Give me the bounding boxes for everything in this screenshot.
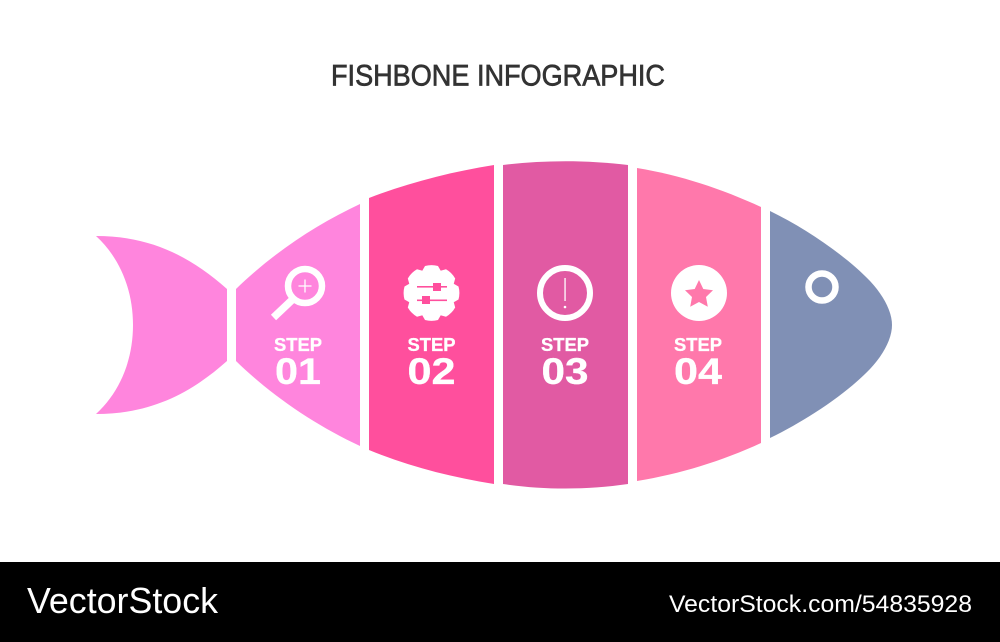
icon: magnifier [274, 269, 322, 318]
label: step 01: STEP [274, 335, 322, 355]
label: step 02 [408, 335, 456, 392]
label: step 03: 03 [542, 351, 588, 392]
fish head [770, 211, 892, 438]
footer brand: VectorStock [27, 580, 219, 621]
footer id: VectorStock.com/54835928 [669, 591, 972, 618]
icon: exclamation circle [540, 268, 590, 318]
label: step 04: STEP [674, 335, 722, 355]
icon: gear with sliders [404, 265, 459, 321]
fish tail [96, 236, 227, 414]
label: step 04 [674, 335, 722, 392]
panel: step 02 [369, 165, 494, 484]
label: step 01: 01 [275, 351, 321, 392]
icon: star badge [671, 265, 727, 321]
panel: step 04 [637, 168, 761, 481]
label: step 03: STEP [541, 335, 589, 355]
label: step 02: STEP [408, 335, 456, 355]
footer band [0, 562, 1000, 642]
panel: step 01 [236, 204, 360, 446]
title: FISHBONE INFOGRAPHIC [331, 60, 665, 92]
label: step 03 [541, 335, 589, 392]
icon: eye [808, 274, 836, 300]
panel: step 03 [503, 161, 628, 488]
label: step 01 [274, 335, 322, 392]
label: step 02: 02 [408, 351, 456, 392]
label: step 04: 04 [674, 351, 722, 392]
